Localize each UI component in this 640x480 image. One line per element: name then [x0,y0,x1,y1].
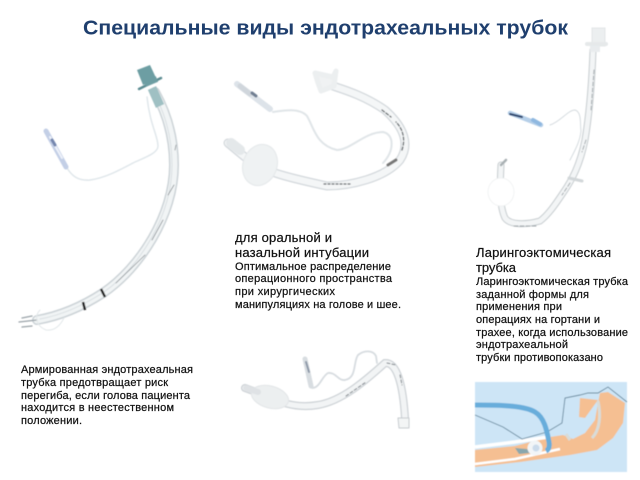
illustration: curved nasal tube [245,351,409,428]
text block: left caption: перегиба, если голова пациента [21,390,191,402]
text block: right caption: Ларингоэктомическая [476,245,611,260]
text block: middle caption: для оральной и [235,230,332,245]
text block: left caption: Армированная эндотрахеальная [21,364,193,376]
text block: right caption: трубки противопоказано [476,352,603,364]
text block: right caption: применения при [476,301,562,313]
text block: middle caption: операционного пространства [235,273,393,285]
illustration: oral and nasal tube [228,71,405,191]
text block: left caption: находится в неестественном [21,402,174,414]
text block: middle caption: при хирургических [235,286,336,298]
text block: right caption: трубка [476,260,517,275]
illustration: laryngectomy tube [488,28,608,226]
text block: right caption: трахее, когда использование [476,327,628,339]
diagram: intubated patient anatomy [475,382,627,472]
title: Специальные виды эндотрахеальных трубок [83,16,569,40]
text block: right caption: заданной формы для [476,289,589,301]
text block: middle caption: манипуляциях на голове и шее. [235,299,401,311]
text block: right caption: эндотрахеальной [476,339,568,351]
text block: right caption: Ларингоэктомическая трубка [476,276,629,288]
text block: left caption [21,364,193,427]
illustration: reinforced tube [19,65,176,330]
text block: right caption [476,245,629,364]
text block: middle caption: Оптимальное распределение [235,261,391,273]
text block: left caption: трубка предотвращает риск [21,377,168,389]
text block: middle caption: назальной интубации [235,245,369,260]
text block: left caption: положении. [21,415,82,427]
text block: middle caption [235,230,401,311]
text block: right caption: операциях на гортани и [476,314,600,326]
